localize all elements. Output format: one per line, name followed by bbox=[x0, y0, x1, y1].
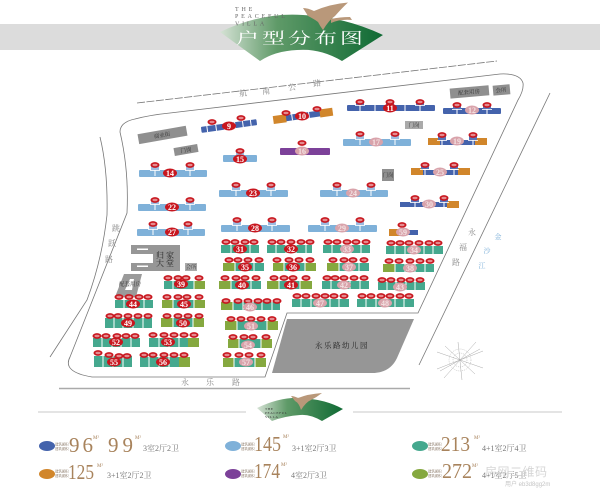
building 28: 28 bbox=[251, 224, 259, 233]
building 49: 49 bbox=[124, 319, 132, 328]
legend: 96-99: M² bbox=[93, 435, 99, 441]
building 39 bbox=[164, 275, 205, 289]
building 44: 44 bbox=[129, 300, 137, 309]
green leaf bbox=[220, 15, 383, 61]
building 55: 55 bbox=[110, 358, 118, 367]
building 12 bbox=[443, 102, 501, 115]
clubhouse bbox=[131, 245, 197, 271]
legend: 125: 建筑面积 bbox=[55, 473, 69, 478]
building 35: 35 bbox=[241, 263, 249, 272]
building 35 bbox=[223, 257, 264, 272]
legend: 174 bbox=[225, 459, 327, 483]
legend: 213: 建筑面积 bbox=[428, 446, 442, 451]
building 44 bbox=[114, 294, 153, 309]
south road name bbox=[181, 377, 240, 387]
building 54 bbox=[228, 334, 272, 350]
building 52: 52 bbox=[112, 338, 120, 347]
building 17 bbox=[343, 131, 411, 147]
building 56 bbox=[140, 352, 190, 367]
legend: 213: 建筑面积 bbox=[428, 442, 442, 446]
building: type 174: 16 bbox=[298, 147, 306, 156]
legend: 213: 4+1室2厅4卫 bbox=[482, 443, 527, 453]
building 50 bbox=[161, 313, 204, 328]
grey band bbox=[0, 24, 600, 50]
legend: 213: 213 bbox=[441, 432, 470, 456]
footer logo text bbox=[265, 407, 288, 419]
north road name: 航 bbox=[238, 88, 248, 98]
facility tags bbox=[137, 84, 510, 181]
river name: 金 bbox=[494, 232, 502, 241]
river name bbox=[478, 232, 502, 270]
clubhouse: 大堂 bbox=[156, 258, 176, 268]
building 14: 14 bbox=[166, 169, 174, 178]
south road name: 乐 bbox=[206, 378, 215, 387]
legend: 96-99: 96 bbox=[69, 433, 93, 457]
swallow logo bbox=[303, 2, 352, 30]
building 19 bbox=[428, 132, 487, 146]
building 11: 11 bbox=[386, 104, 394, 113]
footer leaf bbox=[257, 398, 343, 421]
legend: 174: 174 bbox=[254, 459, 280, 483]
building 36 bbox=[272, 257, 316, 272]
building 36: 36 bbox=[289, 263, 297, 272]
building 11 bbox=[347, 99, 435, 113]
legend: 272: 建筑面积 bbox=[428, 473, 442, 478]
west road name: 跃 bbox=[108, 239, 116, 248]
building 47 bbox=[292, 293, 349, 308]
building 31 bbox=[221, 239, 259, 254]
east road name bbox=[452, 227, 476, 267]
building 14 bbox=[139, 162, 207, 178]
legend: 125: M² bbox=[97, 463, 103, 469]
tag: north west: 商业街 bbox=[153, 130, 171, 140]
footer logo text: VILLA bbox=[265, 415, 278, 419]
building 43 bbox=[378, 277, 425, 292]
right divider bbox=[353, 411, 562, 413]
building 25 bbox=[411, 162, 470, 177]
building 29: 29 bbox=[338, 224, 346, 233]
building 38: 38 bbox=[406, 264, 414, 273]
legend: 174: M² bbox=[281, 462, 287, 468]
legend: 96-99 bbox=[39, 433, 179, 457]
kindergarten bbox=[272, 319, 414, 373]
building 31: 31 bbox=[236, 245, 244, 254]
buildings: type 213 and 272 bbox=[92, 239, 443, 367]
west road edge bbox=[50, 137, 107, 357]
clubhouse annex: 会所 bbox=[185, 263, 197, 271]
building 30 bbox=[400, 195, 459, 209]
footer logo text: PEACEFUL bbox=[265, 411, 288, 415]
buildings: type 145 bbox=[137, 131, 411, 237]
building 37: 37 bbox=[345, 263, 353, 272]
footer swallow bbox=[291, 393, 322, 410]
legend: 174: 4室2厅3卫 bbox=[291, 470, 327, 480]
building 34 bbox=[386, 240, 443, 255]
kindergarten: 永乐路幼儿园 bbox=[315, 340, 369, 350]
tag: east bbox=[382, 169, 394, 181]
building 33 bbox=[323, 239, 370, 254]
support building bbox=[115, 274, 142, 297]
legend: 145: 3+1室2厅3卫 bbox=[292, 443, 337, 453]
building 22 bbox=[138, 197, 206, 212]
tag: north west bbox=[137, 126, 187, 144]
building 29 bbox=[308, 217, 377, 233]
building 15 bbox=[223, 148, 257, 164]
tag: east: 门岗 bbox=[382, 171, 394, 179]
building 33: 33 bbox=[343, 245, 351, 254]
north road name: 南 bbox=[261, 86, 271, 96]
building 53: 53 bbox=[164, 338, 172, 347]
logo text: PEACEFUL bbox=[235, 14, 288, 20]
building: type 174 bbox=[280, 140, 330, 156]
river name: 江 bbox=[478, 261, 486, 270]
legend: 174: 建筑面积 bbox=[241, 468, 255, 474]
building 48 bbox=[357, 293, 414, 308]
building 56: 56 bbox=[159, 358, 167, 367]
watermark bbox=[485, 464, 550, 488]
building 59 bbox=[389, 222, 418, 237]
building 12: 12 bbox=[468, 106, 476, 115]
building 49 bbox=[105, 313, 152, 328]
site roads bbox=[50, 61, 550, 388]
legend: 174: 建筑面积 bbox=[241, 473, 255, 478]
logo text: THE bbox=[235, 7, 255, 13]
logo text: VILLA bbox=[235, 22, 267, 28]
legend bbox=[39, 432, 527, 484]
legend: 145: 建筑面积 bbox=[241, 442, 255, 446]
watermark: 房网二维码 bbox=[485, 464, 548, 479]
legend: 96-99: 99 bbox=[108, 433, 133, 457]
logo text bbox=[235, 7, 288, 28]
building 9: 9 bbox=[227, 122, 231, 131]
legend: 125: 3+1室2厅2卫 bbox=[107, 470, 152, 480]
building 24: 24 bbox=[349, 189, 357, 198]
building 57 bbox=[222, 352, 266, 367]
compass bbox=[437, 342, 483, 380]
tag: centre bbox=[405, 121, 423, 129]
building 24 bbox=[320, 182, 388, 198]
building 39: 39 bbox=[177, 280, 185, 289]
building 52 bbox=[92, 333, 140, 347]
building 51 bbox=[225, 316, 278, 331]
south road name: 永 bbox=[181, 377, 189, 387]
building 27: 27 bbox=[168, 228, 176, 237]
watermark: 用户 eb3d8gg2m bbox=[505, 480, 550, 488]
building 43: 43 bbox=[396, 283, 404, 292]
east road name: 路 bbox=[452, 257, 460, 267]
building 55 bbox=[94, 350, 132, 367]
legend: 96-99: 3室2厅2卫 bbox=[143, 443, 179, 453]
tag: guard post bbox=[173, 144, 199, 156]
legend: 272: 272 bbox=[442, 459, 472, 483]
site boundary bbox=[68, 74, 523, 377]
building 47: 47 bbox=[316, 299, 324, 308]
legend: 272: M² bbox=[472, 463, 478, 469]
buildings: type 96-99 and 125 bbox=[201, 99, 501, 237]
support building: 配套用房 bbox=[119, 280, 141, 288]
tag: guard post: 门岗 bbox=[180, 145, 193, 155]
building 40: 40 bbox=[238, 281, 246, 290]
building 15: 15 bbox=[236, 155, 244, 164]
building 46 bbox=[221, 298, 282, 312]
west road name bbox=[105, 223, 120, 264]
east road name: 福 bbox=[459, 242, 467, 252]
title text: 户型分布图 bbox=[236, 30, 366, 47]
building 9 bbox=[201, 115, 257, 133]
east road name: 永 bbox=[468, 227, 476, 237]
building 57: 57 bbox=[242, 358, 250, 367]
tag: centre: 门岗 bbox=[408, 121, 420, 129]
west road name: 跳 bbox=[112, 223, 120, 233]
legend: 272: 建筑面积 bbox=[428, 468, 442, 474]
building 37 bbox=[327, 257, 369, 272]
building 45: 45 bbox=[180, 300, 188, 309]
west road name: 路 bbox=[105, 254, 113, 264]
east road edge bbox=[419, 93, 550, 365]
building 32: 32 bbox=[287, 245, 295, 254]
tag: far north east: 会所 bbox=[495, 85, 507, 94]
building 51: 51 bbox=[247, 322, 255, 331]
legend: 272 bbox=[412, 459, 527, 483]
building 41: 41 bbox=[287, 281, 295, 290]
building 10: 10 bbox=[298, 112, 306, 121]
building 22: 22 bbox=[168, 203, 176, 212]
building 50: 50 bbox=[179, 319, 187, 328]
legend: 145: 145 bbox=[254, 432, 281, 456]
north road name bbox=[238, 78, 322, 98]
legend: 96-99: M² bbox=[135, 435, 141, 441]
tag: far north east bbox=[493, 84, 510, 96]
building 42: 42 bbox=[340, 281, 348, 290]
south road name: 路 bbox=[232, 377, 240, 387]
legend: 125 bbox=[39, 460, 152, 484]
north road name: 路 bbox=[312, 78, 322, 88]
tag: north east: 配套用房 bbox=[458, 87, 481, 97]
building 25: 25 bbox=[436, 168, 444, 177]
building 41 bbox=[267, 275, 312, 290]
building 45 bbox=[162, 294, 205, 309]
left divider bbox=[38, 411, 246, 413]
building 19: 19 bbox=[453, 137, 461, 146]
north road name: 公 bbox=[288, 83, 297, 92]
legend: 125: 建筑面积 bbox=[55, 468, 69, 474]
legend: 96-99: 建筑面积 bbox=[55, 442, 69, 446]
building 38 bbox=[383, 258, 434, 273]
building 32 bbox=[267, 239, 314, 254]
building 59: 59 bbox=[399, 228, 407, 237]
building 40 bbox=[219, 275, 261, 290]
building 48: 48 bbox=[381, 299, 389, 308]
legend: 145: M² bbox=[283, 434, 289, 440]
building 30: 30 bbox=[425, 200, 433, 209]
building 54: 54 bbox=[244, 341, 252, 350]
building 42 bbox=[322, 275, 369, 290]
building 10 bbox=[273, 106, 333, 124]
tag: north east bbox=[450, 85, 489, 99]
legend: 145: 建筑面积 bbox=[241, 446, 255, 451]
south road edge bbox=[59, 388, 410, 390]
building 27 bbox=[137, 221, 205, 237]
legend: 125: 125 bbox=[68, 460, 94, 484]
building 23: 23 bbox=[249, 189, 257, 198]
legend: 213 bbox=[412, 432, 527, 456]
title banner bbox=[0, 2, 600, 61]
north road edge bbox=[137, 61, 497, 103]
clubhouse: 归家 bbox=[156, 250, 176, 260]
legend: 272: 4+1室2厅5卫 bbox=[482, 470, 527, 480]
legend: 96-99: 建筑面积 bbox=[55, 446, 69, 451]
river name: 沙 bbox=[484, 246, 492, 255]
building 17: 17 bbox=[372, 138, 380, 147]
building 28 bbox=[221, 217, 290, 233]
building 53 bbox=[148, 332, 199, 347]
legend: 145 bbox=[225, 432, 337, 456]
footer logo text: THE bbox=[265, 407, 274, 411]
footer logo bbox=[38, 393, 562, 421]
building 46: 46 bbox=[246, 303, 254, 312]
building 34: 34 bbox=[410, 246, 418, 255]
legend: 213: M² bbox=[474, 435, 480, 441]
road labels bbox=[105, 78, 502, 387]
building 23 bbox=[219, 182, 288, 198]
